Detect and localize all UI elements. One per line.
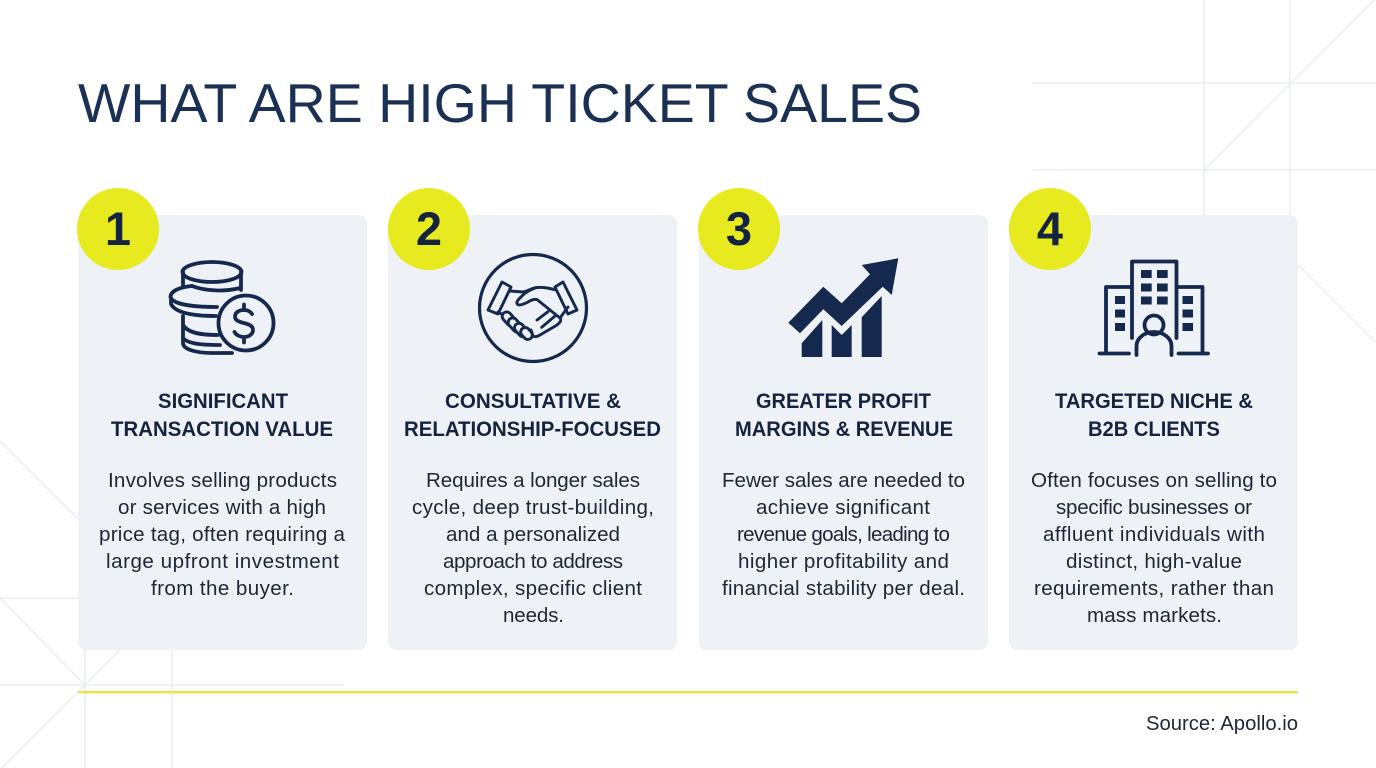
description text (412, 469, 654, 627)
description text: achieve significant (756, 496, 930, 519)
description text: needs. (503, 604, 564, 627)
icon: office building with person (1100, 262, 1208, 355)
description text: financial stability per deal. (722, 577, 965, 600)
number badge 4: 4 (1037, 202, 1063, 255)
heading: SIGNIFICANT (158, 389, 288, 413)
description text: higher profitability and (738, 550, 949, 573)
card background (78, 215, 367, 650)
panel: greater profit margins and revenue (698, 188, 988, 650)
description text (99, 469, 346, 600)
heading: TARGETED NICHE & (1055, 389, 1253, 413)
heading: RELATIONSHIP-FOCUSED (404, 417, 661, 441)
description text: Involves selling products (108, 469, 337, 492)
description text: Requires a longer sales (426, 469, 640, 492)
heading (111, 389, 333, 441)
number badge 3: 3 (726, 202, 752, 255)
heading: MARGINS & REVENUE (735, 417, 953, 441)
card background (698, 215, 988, 650)
card background (388, 215, 677, 650)
description text: complex, specific client (424, 577, 642, 600)
description text: requirements, rather than (1034, 577, 1274, 600)
description text: approach to address (443, 550, 623, 573)
card background (1009, 215, 1298, 650)
icon: coin stack with dollar (170, 262, 274, 353)
heading (1055, 389, 1253, 441)
description text (722, 469, 965, 600)
description text: specific businesses or (1056, 496, 1252, 519)
heading: CONSULTATIVE & (445, 389, 621, 413)
panel: significant transaction value (77, 188, 367, 650)
number badge 2 (388, 188, 470, 270)
description text: Often focuses on selling to (1031, 469, 1277, 492)
description text: or services with a high (118, 496, 326, 519)
heading (404, 389, 661, 441)
description text: large upfront investment (106, 550, 339, 573)
description text: price tag, often requiring a (99, 523, 346, 546)
number badge 3 (698, 188, 780, 270)
description text: Fewer sales are needed to (722, 469, 965, 492)
description text (1031, 469, 1277, 627)
panel: consultative and relationship-focused (388, 188, 677, 650)
icon: rising bar chart with arrow (788, 258, 898, 357)
panel: targeted niche and B2B clients (1009, 188, 1298, 650)
heading (735, 389, 953, 441)
description text: mass markets. (1087, 604, 1222, 627)
description text: cycle, deep trust-building, (412, 496, 654, 519)
description text: affluent individuals with (1043, 523, 1265, 546)
description text: from the buyer. (151, 577, 294, 600)
description text: distinct, high-value (1066, 550, 1242, 573)
number badge 4 (1009, 188, 1091, 270)
number badge 2: 2 (416, 202, 442, 255)
number badge 1 (77, 188, 159, 270)
source credit: Source: Apollo.io (1146, 713, 1298, 735)
heading: B2B CLIENTS (1088, 417, 1220, 441)
description text: revenue goals, leading to (737, 523, 950, 546)
number badge 1: 1 (105, 202, 131, 255)
description text: and a personalized (446, 523, 620, 546)
heading: GREATER PROFIT (756, 389, 931, 413)
heading: TRANSACTION VALUE (111, 417, 333, 441)
title: WHAT ARE HIGH TICKET SALES (78, 72, 922, 134)
icon: handshake in circle (480, 254, 586, 362)
